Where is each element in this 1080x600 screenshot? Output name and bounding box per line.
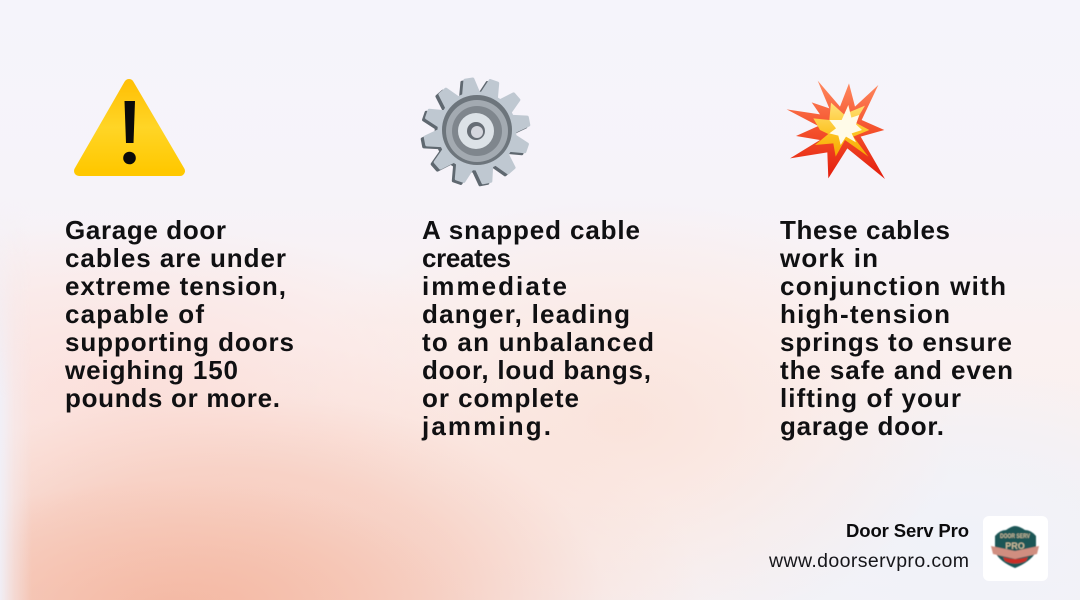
text block: column 2: or complete <box>422 383 579 413</box>
text block: column 1: weighing 150 <box>64 355 238 385</box>
text block: column 2: door, loud bangs, <box>422 355 651 385</box>
icon: explosion <box>787 81 885 179</box>
text block: column 2: A snapped cable <box>422 215 640 245</box>
text block: column 3: garage door. <box>780 411 944 441</box>
text block: column 3: high-tension <box>780 299 950 329</box>
icon: gear <box>414 71 537 193</box>
text block: column 3: work in <box>779 243 878 273</box>
text block: column 3: lifting of your <box>780 383 961 413</box>
text block: column 1: supporting doors <box>65 327 294 357</box>
text block: column 1: cables are under <box>65 243 286 273</box>
text block: column 1: pounds or more. <box>65 383 280 413</box>
text block: column 2: creates <box>422 243 511 273</box>
text block: column 3: springs to ensure <box>780 327 1012 357</box>
brand name: Door Serv Pro <box>846 520 969 541</box>
website url: www.doorservpro.com <box>768 550 969 572</box>
text block: column 2: jamming. <box>421 411 551 441</box>
text block: column 1: Garage door <box>65 215 226 245</box>
logo badge: PRO <box>1005 541 1025 551</box>
icon: warning triangle <box>79 84 180 171</box>
text block: column 1: extreme tension, <box>65 271 286 301</box>
logo badge <box>983 516 1048 581</box>
text block: column 2: danger, leading <box>422 299 630 329</box>
text block: column 3: the safe and even <box>780 355 1013 385</box>
text block: column 3: These cables <box>780 215 950 245</box>
text block: column 2: immediate <box>422 271 567 301</box>
logo badge: DOOR SERV <box>1000 534 1030 540</box>
text block: column 2: to an unbalanced <box>422 327 654 357</box>
text block: column 3: conjunction with <box>780 271 1006 301</box>
text block: column 1: capable of <box>65 299 204 329</box>
